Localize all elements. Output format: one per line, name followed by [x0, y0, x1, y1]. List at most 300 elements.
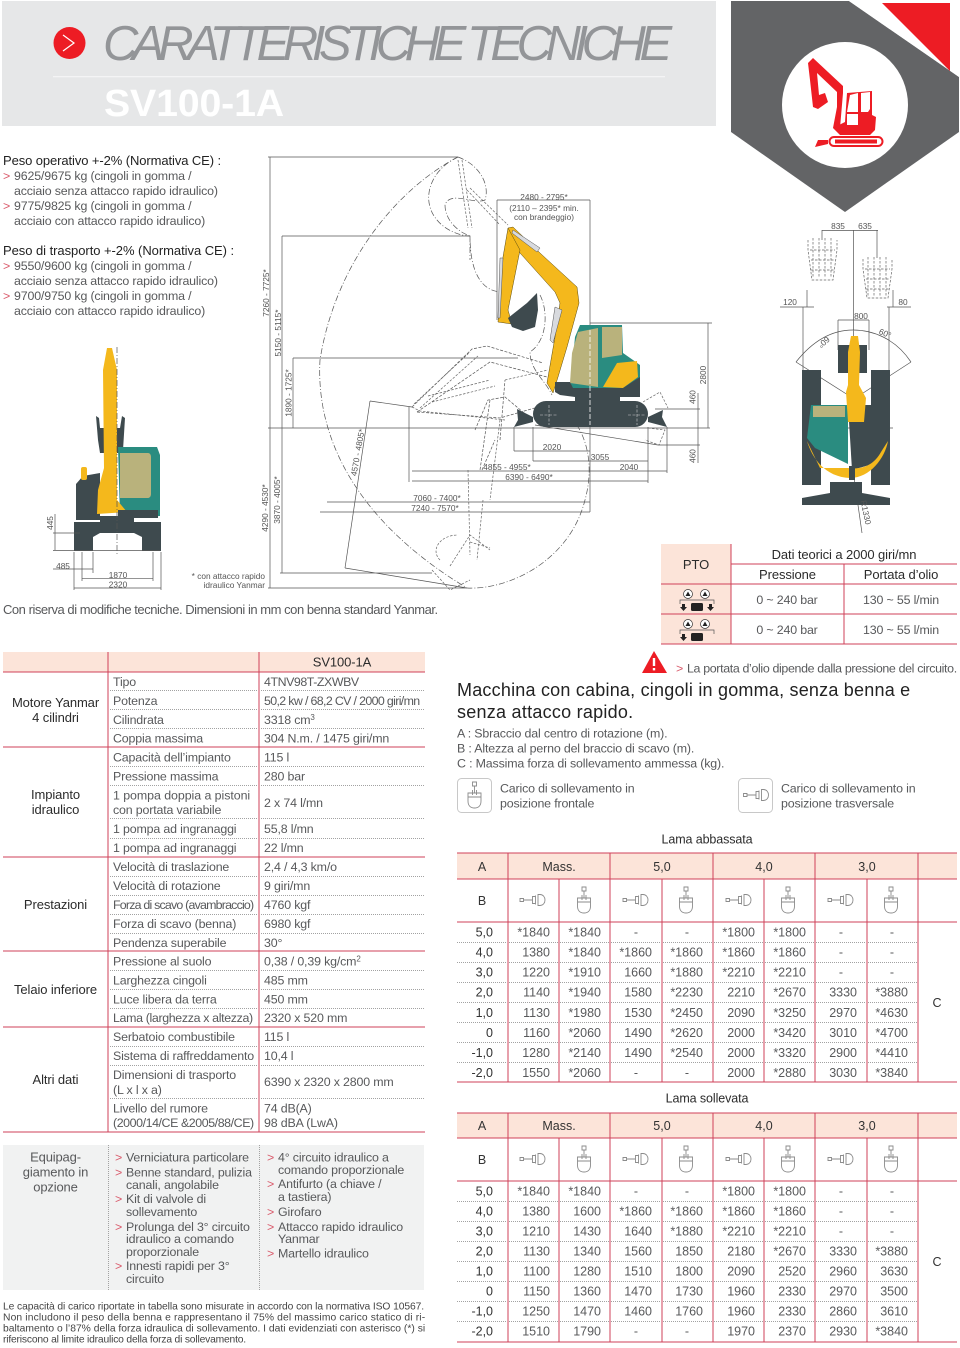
- row values: 2,4 / 4,3 km/o: [264, 860, 337, 874]
- panel: optional equipment: >: [267, 1205, 274, 1219]
- table: lifting capacity blade raised: 2970: [829, 1284, 857, 1298]
- diagram: excavator top view with swing angles: 120: [783, 297, 797, 307]
- row labels: 1 pompa doppia a pistoni: [113, 788, 250, 802]
- table: lifting capacity blade raised: -: [634, 1184, 638, 1198]
- title: CARATTERISTICHE TECNICHE: [103, 17, 673, 71]
- table: lifting capacity blade down: *1860: [722, 946, 755, 960]
- row values: 3: [310, 713, 315, 722]
- panel: optional equipment: >: [267, 1220, 274, 1234]
- row values: 304 N.m. / 1475 giri/mn: [264, 732, 389, 746]
- table: lifting capacity blade raised: *1860: [670, 1204, 703, 1218]
- diagram: excavator front view: 2320: [109, 580, 128, 590]
- table: lifting capacity blade down: -1,0: [471, 1046, 493, 1060]
- row labels: 1 pompa ad ingranaggi: [113, 841, 236, 855]
- row labels: Coppia massima: [113, 732, 203, 746]
- table: lifting capacity blade raised: 2960: [829, 1264, 857, 1278]
- legend: side lift icon: [738, 778, 916, 812]
- table: lifting capacity blade raised: *1860: [722, 1204, 755, 1218]
- row labels: (2000/14/CE &2005/88/CE): [113, 1116, 254, 1130]
- table: lifting capacity blade raised: *2210: [722, 1224, 755, 1238]
- note: oil flow: La portata d’olio dipende dalla pressione del circuito.: [687, 662, 957, 676]
- row values: 22 l/mn: [264, 841, 304, 855]
- table: lifting capacity blade raised: -2,0: [471, 1324, 493, 1338]
- table: lifting capacity blade down: 3010: [829, 1026, 857, 1040]
- table: lifting capacity blade down: Mass.: [542, 860, 576, 874]
- table: lifting capacity blade down: *4630: [875, 1006, 908, 1020]
- table: lifting capacity blade raised: 3610: [880, 1304, 908, 1318]
- icon: red arrow bullet: [54, 27, 86, 59]
- weight specifications text: >: [3, 169, 10, 183]
- panel: optional equipment: giamento in: [23, 1164, 88, 1180]
- row labels: Luce libera da terra: [113, 992, 217, 1006]
- table: lifting capacity blade down: *1860: [670, 946, 703, 960]
- dimension labels: 4570 - 4805*: [348, 427, 367, 477]
- table: lifting capacity blade down: 4,0: [755, 860, 773, 874]
- table: lifting capacity blade raised: 1850: [675, 1244, 703, 1258]
- diagram: excavator top view with swing angles: 80: [898, 297, 908, 307]
- diagram: excavator top view with swing angles: R1330: [859, 499, 873, 526]
- row values: 4TNV98T-ZXWBV: [264, 675, 360, 689]
- table: lifting capacity blade down: 2000: [727, 1066, 755, 1080]
- row labels: Tipo: [113, 675, 136, 689]
- table: lifting capacity blade raised: *1840: [568, 1184, 601, 1198]
- weight specifications text: >: [3, 259, 10, 273]
- table: general specifications: SV100-1A: [313, 654, 372, 670]
- icon: warning triangle: [642, 651, 667, 673]
- row labels: 1 pompa ad ingranaggi: [113, 822, 236, 836]
- table: lifting capacity blade raised: 1150: [523, 1284, 550, 1298]
- row labels: Pressione massima: [113, 770, 219, 784]
- table: lifting capacity blade down: -: [890, 966, 894, 980]
- table: lifting capacity blade raised: 2860: [829, 1304, 857, 1318]
- table: lifting capacity blade down: 1160: [523, 1026, 550, 1040]
- row values: 74 dB(A): [264, 1102, 312, 1116]
- legend: side lift icon: Carico di sollevamento in: [781, 782, 916, 796]
- panel: optional equipment: Benne standard, pulizia: [126, 1166, 252, 1180]
- table: lifting capacity blade down: 2000: [727, 1026, 755, 1040]
- table: lifting capacity blade raised: 1970: [727, 1324, 755, 1338]
- table: lifting capacity blade down: *1860: [619, 946, 652, 960]
- dimension labels: 2800: [698, 365, 708, 384]
- row values: 6980 kgf: [264, 917, 311, 931]
- table: lifting capacity blade raised: *1860: [773, 1204, 806, 1218]
- legend: A B C definitions: A : Sbraccio dal centro di rotazione (m).: [457, 726, 667, 740]
- table: lifting capacity blade down: *1980: [568, 1006, 601, 1020]
- row values: 3318 cm: [264, 713, 310, 727]
- footnote: load capacity: [3, 1302, 425, 1346]
- category labels: [12, 695, 100, 1087]
- table: lifting capacity blade down: 2970: [829, 1006, 857, 1020]
- table: lifting capacity blade raised: *1800: [773, 1184, 806, 1198]
- table: lifting capacity blade raised: B: [478, 1153, 486, 1167]
- panel: optional equipment: Yanmar: [278, 1232, 320, 1246]
- table: lifting capacity blade raised: 3,0: [476, 1224, 493, 1238]
- table: lifting capacity blade raised: Mass.: [542, 1119, 576, 1133]
- panel: optional equipment: >: [115, 1192, 122, 1206]
- table: lifting capacity blade raised: 1470: [573, 1304, 601, 1318]
- row values: 4760 kgf: [264, 898, 311, 912]
- table: lifting capacity blade raised: -: [890, 1224, 894, 1238]
- weight specifications text: 9550/9600 kg (cingoli in gomma /: [14, 259, 192, 273]
- category labels: Prestazioni: [24, 897, 87, 912]
- table: lifting capacity blade raised: -: [839, 1184, 843, 1198]
- table: PTO data: Portata d’olio: [864, 567, 938, 582]
- row labels: Lama (larghezza x altezza): [113, 1011, 253, 1025]
- table: lifting capacity blade down: 1660: [624, 966, 652, 980]
- dimension labels: 460: [688, 390, 698, 404]
- row labels: Cilindrata: [113, 713, 164, 727]
- row values: 10,4 l: [264, 1049, 293, 1063]
- row labels: (L x l x a): [113, 1083, 162, 1097]
- row values: 485 mm: [264, 974, 308, 988]
- panel: optional equipment: Prolunga del 3° circuito: [126, 1220, 250, 1234]
- footnote: load capacity: riferiscono al limite idraulico della forza di sollevamento.: [3, 1334, 246, 1346]
- table: lifting capacity blade down: [457, 853, 957, 1082]
- table: lifting capacity blade raised: -: [839, 1224, 843, 1238]
- dimension labels: 2040: [620, 462, 639, 472]
- dimension labels: 4290 - 4530*: [260, 483, 270, 532]
- row values: 50,2 kw / 68,2 CV / 2000 giri/mn: [264, 694, 420, 708]
- row values: 2320 x 520 mm: [264, 1011, 347, 1025]
- table: lifting capacity blade raised: 3500: [880, 1284, 908, 1298]
- table: lifting capacity blade down: *1840: [517, 926, 550, 940]
- table: lifting capacity blade down: 2000: [727, 1046, 755, 1060]
- table: lifting capacity blade raised: 2180: [727, 1244, 755, 1258]
- table: lifting capacity blade down: *3320: [773, 1046, 806, 1060]
- row values: 0,38 / 0,39 kg/cm: [264, 954, 356, 968]
- dimension labels: 7240 - 7570*: [411, 503, 460, 513]
- panel: optional equipment: a tastiera): [278, 1190, 331, 1204]
- table: lifting capacity blade raised: -: [634, 1324, 638, 1338]
- diagram: excavator side view with working ranges: [260, 157, 712, 590]
- row values: 30°: [264, 936, 282, 950]
- table: PTO data: 130 ~ 55 l/min: [863, 623, 939, 637]
- table: lifting capacity blade down: 1550: [522, 1066, 550, 1080]
- note: quick coupler asterisk: idraulico Yanmar: [204, 580, 265, 590]
- table: lifting capacity blade raised: 1730: [675, 1284, 703, 1298]
- table: lifting capacity blade down: 0: [486, 1026, 493, 1040]
- table: lifting capacity blade raised: *1800: [722, 1184, 755, 1198]
- table: lifting capacity blade raised: 1510: [624, 1264, 652, 1278]
- table: lifting capacity blade raised: *1860: [619, 1204, 652, 1218]
- note: oil flow: >: [676, 662, 683, 676]
- table: lifting capacity blade raised: 1340: [573, 1244, 601, 1258]
- table: lifting capacity blade down: *4700: [875, 1026, 908, 1040]
- table: PTO data: 0 ~ 240 bar: [756, 623, 818, 637]
- table: lifting capacity blade down: 1490: [624, 1046, 652, 1060]
- dimension labels: 1890 - 1725*: [284, 368, 294, 417]
- table: lifting capacity blade down: -: [634, 1066, 638, 1080]
- table: lifting capacity blade down: 1380: [522, 946, 550, 960]
- table: lifting capacity blade down: 1490: [624, 1026, 652, 1040]
- weight specifications text: 9625/9675 kg (cingoli in gomma /: [14, 169, 192, 183]
- diagram: excavator top view with swing angles: 60°: [877, 326, 893, 340]
- table: lifting capacity blade down: *2230: [670, 986, 703, 1000]
- panel: optional equipment: >: [115, 1259, 122, 1273]
- dimension labels: 4855 - 4955*: [483, 462, 532, 472]
- category labels: Motore Yanmar: [12, 695, 100, 710]
- table: lifting capacity blade down: *2210: [773, 966, 806, 980]
- dimension labels: 7060 - 7400*: [413, 493, 462, 503]
- table: lifting capacity blade raised: 2520: [778, 1264, 806, 1278]
- table: lifting capacity blade down: *2670: [773, 986, 806, 1000]
- table: lifting capacity blade raised: *1840: [517, 1184, 550, 1198]
- category labels: idraulico: [32, 802, 79, 817]
- panel: optional equipment: Equipag-: [30, 1150, 81, 1164]
- weight specifications text: acciaio senza attacco rapido idraulico): [14, 184, 218, 198]
- table: lifting capacity blade down: *2880: [773, 1066, 806, 1080]
- row labels: Forza di scavo (benna): [113, 917, 236, 931]
- table: lifting capacity blade raised: 2090: [727, 1264, 755, 1278]
- legend: A B C definitions: [457, 726, 724, 770]
- table: lifting capacity blade down: -: [685, 1066, 689, 1080]
- row values: 2: [356, 954, 361, 964]
- table: lifting capacity blade down: *2140: [568, 1046, 601, 1060]
- table: lifting capacity blade down: *3250: [773, 1006, 806, 1020]
- table: lifting capacity blade raised: 1380: [522, 1204, 550, 1218]
- table: lifting capacity blade raised: 1430: [573, 1224, 601, 1238]
- table: PTO data: [661, 544, 957, 644]
- cabin: [570, 325, 640, 390]
- table: lifting capacity blade raised: *3880: [875, 1244, 908, 1258]
- row values: 2 x 74 l/mn: [264, 796, 323, 810]
- note: technical reservation: Con riserva di modifiche tecniche. Dimensioni in mm con benna standard Yanmar.: [3, 602, 438, 617]
- dimension labels: 5150 - 5115*: [273, 309, 283, 356]
- panel: optional equipment: opzione: [33, 1180, 78, 1194]
- row labels: Capacità dell’impianto: [113, 750, 231, 764]
- legend: front lift icon: Carico di sollevamento in: [500, 782, 635, 796]
- table: lifting capacity blade down: -: [890, 946, 894, 960]
- table: lifting capacity blade raised: C: [932, 1255, 942, 1269]
- dimension labels: 2020: [543, 442, 562, 452]
- header panel: [2, 1, 716, 126]
- table: lifting capacity blade down: *1840: [568, 946, 601, 960]
- heading: blade down: Lama abbassata: [661, 832, 753, 846]
- table: lifting capacity blade raised: 3,0: [858, 1119, 876, 1133]
- row values: 450 mm: [264, 992, 308, 1006]
- weight specifications text: 9775/9825 kg (cingoli in gomma /: [14, 199, 192, 213]
- note: quick coupler asterisk: [192, 571, 265, 590]
- table: lifting capacity blade down: 5,0: [653, 860, 671, 874]
- table: lifting capacity blade down: *2450: [670, 1006, 703, 1020]
- panel: optional equipment: >: [115, 1220, 122, 1234]
- table: lifting capacity blade raised: 1470: [624, 1284, 652, 1298]
- table: lifting capacity blade down: -: [839, 926, 843, 940]
- panel: optional equipment: Kit di valvole di: [126, 1192, 206, 1206]
- panel: optional equipment: Verniciatura particolare: [126, 1150, 249, 1164]
- table: lifting capacity blade down: 3030: [829, 1066, 857, 1080]
- table: lifting capacity blade raised: 1130: [523, 1244, 550, 1258]
- table: lifting capacity blade down: *2060: [568, 1026, 601, 1040]
- weight specifications text: >: [3, 199, 10, 213]
- table: lifting capacity blade raised: 1790: [573, 1324, 601, 1338]
- category labels: Telaio inferiore: [14, 982, 97, 997]
- table: lifting capacity blade raised: 1,0: [476, 1264, 493, 1278]
- dimension labels: (2110 – 2395* min.: [509, 203, 579, 213]
- table: lifting capacity blade raised: *2210: [773, 1224, 806, 1238]
- panel: optional equipment: >: [267, 1150, 274, 1164]
- row labels: [113, 675, 254, 1130]
- footnote: load capacity: Non includono il peso della benna e rappresentano il 75% del massimo carico statico di ri-: [3, 1312, 425, 1324]
- table: lifting capacity blade down: C: [932, 996, 942, 1010]
- weight specifications text: >: [3, 289, 10, 303]
- table: lifting capacity blade raised: -1,0: [471, 1304, 493, 1318]
- weight specifications text: [3, 153, 234, 318]
- table: lifting capacity blade raised: 2330: [778, 1304, 806, 1318]
- row labels: Serbatoio combustibile: [113, 1030, 235, 1044]
- diagram: excavator top view with swing angles: 800: [854, 311, 868, 321]
- dimension labels: 3870 - 4005*: [272, 475, 282, 524]
- row values: 280 bar: [264, 770, 305, 784]
- table: lifting capacity blade down: -: [634, 926, 638, 940]
- table: lifting capacity blade down: -: [839, 946, 843, 960]
- table: lifting capacity blade down: -2,0: [471, 1066, 493, 1080]
- row labels: Livello del rumore: [113, 1102, 208, 1116]
- row values: 115 l: [264, 1030, 289, 1044]
- table: lifting capacity blade raised: *3840: [875, 1324, 908, 1338]
- weight specifications text: acciaio con attacco rapido idraulico): [14, 304, 205, 318]
- panel: optional equipment: sollevamento: [126, 1205, 197, 1219]
- icon: PTO flow one direction: [680, 620, 714, 641]
- legend: A B C definitions: B : Altezza al perno del braccio di scavo (m).: [457, 742, 694, 756]
- heading: blade raised: Lama sollevata: [666, 1092, 748, 1106]
- dimension labels: 6390 - 6490*: [505, 472, 554, 482]
- panel: optional equipment: idraulico a comando: [126, 1232, 234, 1246]
- table: lifting capacity blade raised: 4,0: [476, 1204, 493, 1218]
- table: lifting capacity blade raised: 1250: [522, 1304, 550, 1318]
- note: quick coupler asterisk: * con attacco rapido: [192, 571, 265, 581]
- track: [533, 401, 648, 427]
- diagram: excavator top view with swing angles: 835: [831, 221, 845, 231]
- panel: optional equipment: proporzionale: [126, 1245, 199, 1259]
- panel: optional equipment: Girofaro: [278, 1205, 322, 1219]
- load icons: [520, 887, 898, 913]
- table: lifting capacity blade down: *2210: [722, 966, 755, 980]
- table: lifting capacity blade down: *2540: [670, 1046, 703, 1060]
- row labels: Velocità di rotazione: [113, 879, 221, 893]
- row labels: Pendenza superabile: [113, 936, 227, 950]
- panel: optional equipment: Attacco rapido idraulico: [278, 1220, 403, 1234]
- panel: optional equipment: 4° circuito idraulico a: [278, 1150, 389, 1164]
- table: lifting capacity blade raised: 1760: [675, 1304, 703, 1318]
- table: lifting capacity blade raised: 1460: [624, 1304, 652, 1318]
- table: lifting capacity blade down: 4,0: [476, 946, 493, 960]
- table: lifting capacity blade down: *3840: [875, 1066, 908, 1080]
- diagram: excavator top view with swing angles: 635: [858, 221, 872, 231]
- table: lifting capacity blade raised: 1640: [624, 1224, 652, 1238]
- row values: 115 l: [264, 750, 289, 764]
- table: lifting capacity blade down: *1800: [773, 926, 806, 940]
- weight specifications text: acciaio senza attacco rapido idraulico): [14, 274, 218, 288]
- table: lifting capacity blade raised: 1960: [727, 1304, 755, 1318]
- table: lifting capacity blade raised: 1360: [573, 1284, 601, 1298]
- table: lifting capacity blade raised: 1800: [675, 1264, 703, 1278]
- table: lifting capacity blade down: 1220: [522, 966, 550, 980]
- table: lifting capacity blade down: *1940: [568, 986, 601, 1000]
- panel: optional equipment: [3, 1145, 424, 1291]
- table: lifting capacity blade down: 1130: [523, 1006, 550, 1020]
- panel: optional equipment: >: [267, 1177, 274, 1191]
- table: lifting capacity blade raised: -: [685, 1324, 689, 1338]
- table: PTO data: Dati teorici a 2000 giri/mn: [772, 547, 916, 562]
- table: lifting capacity blade down: 5,0: [476, 926, 493, 940]
- table: lifting capacity blade raised: 5,0: [653, 1119, 671, 1133]
- diagram: excavator top view with swing angles: [780, 221, 911, 533]
- table: lifting capacity blade down: 2,0: [476, 986, 493, 1000]
- table: lifting capacity blade down: *1910: [568, 966, 601, 980]
- table: lifting capacity blade raised: 1510: [522, 1324, 550, 1338]
- footnote: load capacity: baltamento o l’87% della forza idraulica di sollevamento. I dati evidenziati con asterisco (*) si: [3, 1324, 425, 1334]
- table: lifting capacity blade down: 1140: [523, 986, 550, 1000]
- table: PTO data: 130 ~ 55 l/min: [863, 593, 939, 607]
- table: lifting capacity blade down: 1,0: [476, 1006, 493, 1020]
- table: lifting capacity blade down: *3420: [773, 1026, 806, 1040]
- weight specifications text: acciaio con attacco rapido idraulico): [14, 214, 205, 228]
- dimension labels: 460: [688, 449, 698, 463]
- row labels: Velocità di traslazione: [113, 860, 229, 874]
- panel: optional equipment: >: [115, 1150, 122, 1164]
- dimension labels: [260, 192, 708, 532]
- bucket: [508, 293, 538, 331]
- legend: front lift icon: [458, 778, 635, 812]
- table: lifting capacity blade raised: 1280: [573, 1264, 601, 1278]
- weight specifications text: 9700/9750 kg (cingoli in gomma /: [14, 289, 192, 303]
- table: lifting capacity blade down: *4410: [875, 1046, 908, 1060]
- table: lifting capacity blade raised: 3330: [829, 1244, 857, 1258]
- table: lifting capacity blade down: 1580: [624, 986, 652, 1000]
- row labels: Dimensioni di trasporto: [113, 1068, 236, 1082]
- row labels: Potenza: [113, 694, 158, 708]
- table: lifting capacity blade raised: -: [890, 1204, 894, 1218]
- legend: front lift icon: posizione frontale: [500, 796, 595, 810]
- table: lifting capacity blade down: -: [839, 966, 843, 980]
- diagram: excavator front view: 445: [45, 516, 55, 530]
- panel: optional equipment: Martello idraulico: [278, 1246, 369, 1260]
- table: lifting capacity blade down: A: [478, 860, 487, 874]
- table: lifting capacity blade raised: *1880: [670, 1224, 703, 1238]
- table: lifting capacity blade raised: 4,0: [755, 1119, 773, 1133]
- category labels: 4 cilindri: [32, 710, 79, 725]
- table: lifting capacity blade down: 2900: [829, 1046, 857, 1060]
- boom and arm: [508, 227, 579, 393]
- table: lifting capacity blade raised: 1600: [573, 1204, 601, 1218]
- table: lifting capacity blade raised: -: [890, 1184, 894, 1198]
- row values: 98 dBA (LwA): [264, 1116, 338, 1130]
- icon: PTO flow both directions: [680, 590, 714, 611]
- table: lifting capacity blade down: *1860: [773, 946, 806, 960]
- table: PTO data: PTO: [683, 557, 709, 572]
- load icons: [520, 1146, 898, 1172]
- table: lifting capacity blade down: 1530: [624, 1006, 652, 1020]
- model name: SV100-1A: [104, 83, 284, 125]
- table: lifting capacity blade raised: [457, 1113, 957, 1342]
- panel: optional equipment: circuito: [126, 1272, 164, 1286]
- panel: optional equipment: Innesti rapidi per 3°: [126, 1259, 230, 1273]
- table: lifting capacity blade down: 2090: [727, 1006, 755, 1020]
- table: lifting capacity blade down: *2060: [568, 1066, 601, 1080]
- table: lifting capacity blade down: 3330: [829, 986, 857, 1000]
- panel: optional equipment: comando proporzionale: [278, 1163, 404, 1177]
- table: lifting capacity blade down: *3880: [875, 986, 908, 1000]
- panel: optional equipment: canali, angolabile: [126, 1178, 219, 1192]
- weight specifications text: Peso operativo +-2% (Normativa CE) :: [3, 153, 221, 168]
- diagram: excavator front view: 1870: [109, 570, 128, 580]
- legend: A B C definitions: C : Massima forza di sollevamento ammessa (kg).: [457, 756, 724, 770]
- table: PTO data: Pressione: [759, 567, 816, 582]
- table: lifting capacity blade raised: 2330: [778, 1284, 806, 1298]
- table: lifting capacity blade raised: 3630: [880, 1264, 908, 1278]
- diagram: excavator front view: [45, 347, 161, 590]
